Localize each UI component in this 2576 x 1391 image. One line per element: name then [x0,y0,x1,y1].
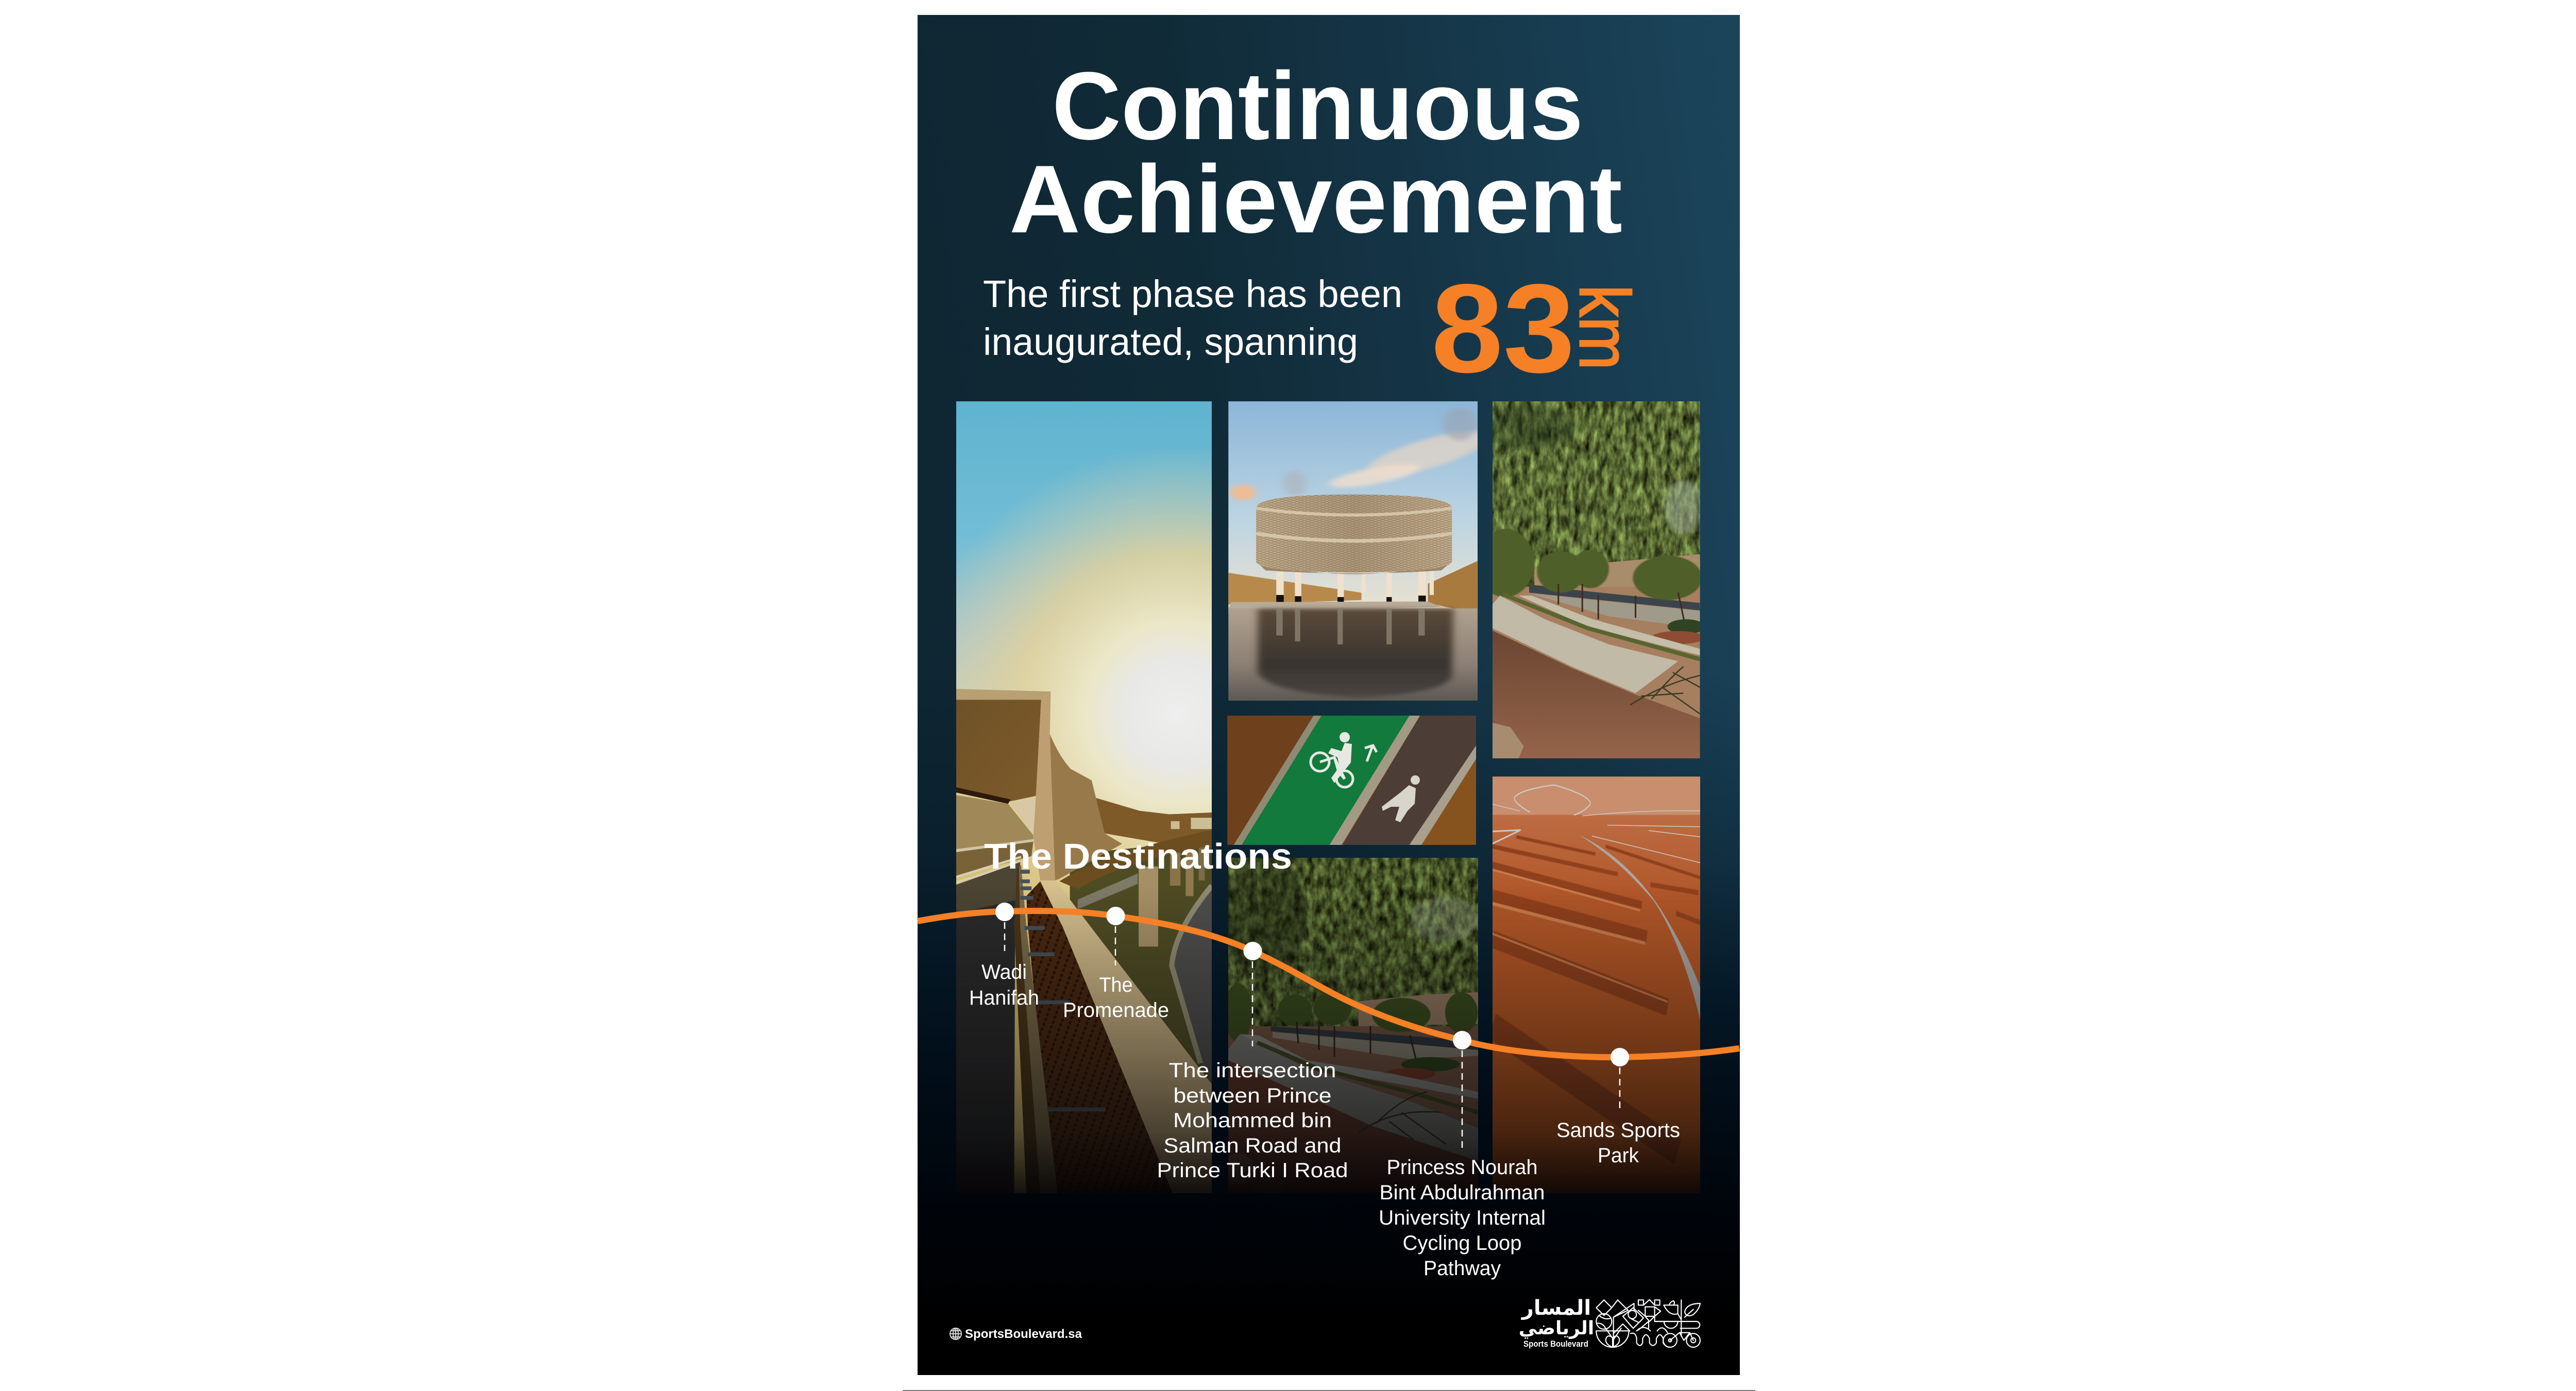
photo: sunset over boulevard bridge [956,401,1212,1193]
route line [918,911,1739,1057]
photo: lattice pavilion over water [1228,401,1500,702]
icon: pedestrian marking [1382,775,1420,822]
stat: 83 km: 83 [1431,258,1575,399]
destination: Princess Nourah University loop: Bint Abdulrahman [1380,1181,1545,1204]
icon: geometric logo mark [1596,1300,1700,1347]
destination: Princess Nourah University loop: Princess Nourah [1387,1156,1537,1179]
logo: Sports Boulevard: الرياضي [1519,1318,1594,1339]
title: Continuous [1052,52,1583,160]
photo: red sand sports park [1493,776,1701,1194]
destination: Sands Sports Park: Sands Sports [1556,1119,1680,1142]
destination: Princess Nourah University loop: Pathway [1423,1257,1501,1280]
poster panel [918,15,1740,1375]
destination: Prince Mohammed bin Salman and Prince Turki I Road intersection [1157,942,1348,1182]
photo: cycling and pedestrian track [1227,716,1478,846]
destination: The Promenade: Promenade [1063,999,1169,1022]
stat: 83 km [1431,258,1644,399]
destination: Wadi Hanifah [969,903,1039,1009]
destination: The Promenade: The [1099,974,1132,996]
destination: Princess Nourah University loop: Cycling Loop [1402,1232,1522,1254]
intro text: inaugurated, spanning [983,320,1358,363]
stat: 83 km: km [1565,285,1644,370]
destination: Princess Nourah University loop: University Internal [1379,1207,1546,1229]
title [1009,52,1622,253]
destination: The Promenade [1063,907,1169,1022]
title: Achievement [1009,145,1622,253]
photo: trees and walking path [1476,401,1705,758]
destination: Wadi Hanifah: Hanifah [969,987,1039,1009]
destination: Sands Sports Park: Park [1598,1144,1639,1167]
destination: Prince Mohammed bin Salman and Prince Turki I Road intersection: between Prince [1174,1084,1331,1107]
logo: Sports Boulevard: المسار [1521,1296,1591,1320]
destination: Prince Mohammed bin Salman and Prince Turki I Road intersection: Mohammed bin [1173,1109,1332,1132]
destination: Prince Mohammed bin Salman and Prince Turki I Road intersection: Prince Turki I Road [1157,1159,1348,1182]
destination: Princess Nourah University loop [1379,1031,1546,1280]
destination: Prince Mohammed bin Salman and Prince Turki I Road intersection: Salman Road and [1163,1134,1342,1157]
intro text: The first phase has been [983,273,1402,315]
website link: SportsBoulevard.sa [965,1327,1082,1341]
heading: The Destinations: The Destinations [984,836,1292,876]
destination: Wadi Hanifah: Wadi [981,961,1027,983]
logo: Sports Boulevard: Sports Boulevard [1523,1339,1588,1349]
icon: cyclist marking [1311,732,1377,787]
photo: trees and path, lower view [1221,854,1479,1195]
logo: Sports Boulevard [1519,1296,1700,1349]
destination: Sands Sports Park [1556,1048,1680,1167]
destination: Prince Mohammed bin Salman and Prince Turki I Road intersection: The intersection [1168,1059,1336,1082]
intro text [983,273,1402,363]
photo fade overlay [956,886,1700,1193]
bottom rule [903,1390,1755,1391]
